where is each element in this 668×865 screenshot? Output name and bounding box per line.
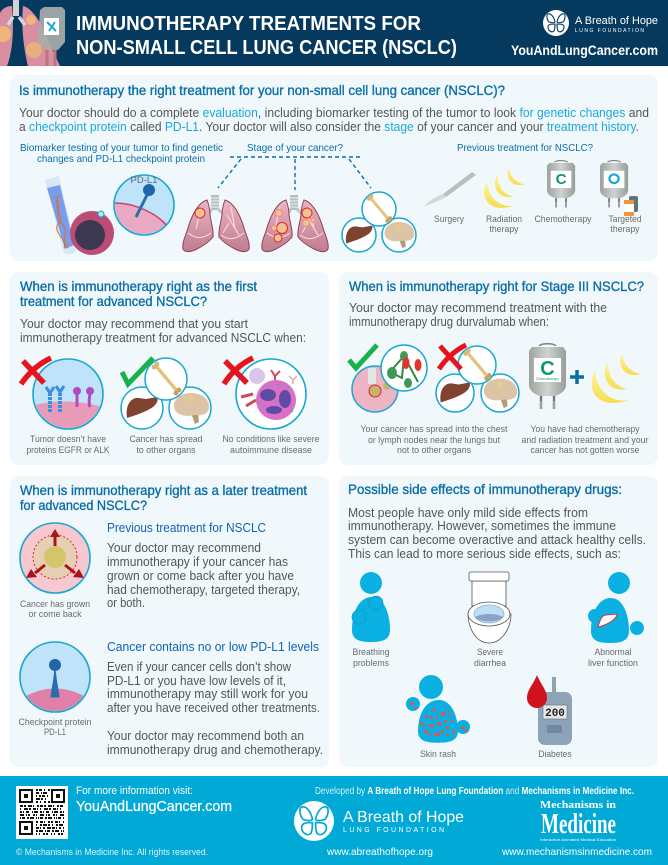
icon: chemotherapy bag: Chemotherapy [536,377,559,381]
treatment captions: Chemotherapy [534,214,592,225]
body text: grown or come back after you have [107,569,294,583]
body text: immunotherapy drug and chemotherapy. [107,743,323,757]
body text: Even if your cancer cells don’t show [107,660,292,674]
caption [352,647,390,669]
treatment captions: therapy [490,224,519,235]
body text [348,506,646,561]
icon: red cross [21,358,51,384]
body text: immunotherapy if your cancer has [107,555,288,569]
website links [326,846,652,858]
icon: immune cell [236,359,306,429]
heading: When is immunotherapy right as the first [20,278,257,294]
captions: and radiation treatment and your [522,435,648,446]
icon: chemotherapy bag [529,344,566,409]
logo: A Breath of Hope: A Breath of Hope [343,809,464,826]
body text: Your doctor may recommend both an [107,729,304,743]
captions: Tumor doesn’t have [30,434,106,445]
visit text: For more information visit: [76,785,193,797]
icon: no EGFR or ALK proteins [33,359,103,429]
body text [107,541,300,610]
caption: Checkpoint protein [18,717,92,728]
icon: growing tumor [20,523,90,593]
caption: liver function [588,658,638,669]
body text [349,301,607,329]
title: IMMUNOTHERAPY TREATMENTS FOR [76,13,422,35]
body text [107,660,323,757]
website links: www.mechanismsinmedicine.com [501,846,652,858]
body text: immunotherapy. However, sometimes the immune [348,519,616,533]
icon: chemotherapy bag: C [540,358,555,380]
header banner [0,0,668,66]
icon: distant organs [342,192,416,252]
body text: had chemotherapy, targeted therapy, [107,583,300,597]
icon: red cross [439,345,466,369]
captions: proteins EGFR or ALK [26,445,110,456]
icon: lungs and infusion bag [0,0,65,66]
logo: A Breath of Hope: LUNG FOUNDATION [575,28,644,34]
body text: Most people have only mild side effects from [348,506,588,520]
caption: PD-L1 [44,727,66,738]
body text [20,317,306,345]
body text: immunotherapy drug durvalumab when: [349,315,549,329]
icon: tumor cell [70,211,114,255]
captions: autoimmune disease [230,445,312,456]
icon: green check [122,358,153,384]
captions: Your cancer has spread into the chest [360,424,508,435]
icon: test tube [45,176,76,254]
visit text: YouAndLungCancer.com [76,798,232,815]
dashed connectors [218,157,371,190]
captions: not to other organs [397,445,471,456]
visit text [76,785,232,815]
panel: stage III NSCLC [339,272,658,465]
icon: PD-L1 magnified: PD-L1 [131,175,157,186]
logo: Mechanisms in Medicine: Medicine [541,809,616,840]
treatment captions [434,214,642,235]
icon: checkpoint protein [20,642,90,712]
body text: immunotherapy treatment for advanced NSCLC when: [20,331,306,345]
footer [0,776,668,865]
title: NON-SMALL CELL LUNG CANCER (NSCLC) [76,37,457,59]
logo: Mechanisms in Medicine: Mechanisms in [540,799,616,811]
body text: immunotherapy may still work for you [107,687,308,701]
logo: A Breath of Hope: LUNG FOUNDATION [343,827,444,834]
intro text: Your doctor should do a complete evaluation, including biomarker testing of the tumor to look for genetic changes and [19,106,649,120]
developed by: Developed by A Breath of Hope Lung Foundation and Mechanisms in Medicine Inc. [315,786,634,797]
captions: to other organs [136,445,196,456]
treatment captions: Targeted [608,214,642,225]
icon: glucose meter and blood drop [527,675,572,745]
body text: PD-L1 or you have low levels of it, [107,674,286,688]
heading: Possible side effects of immunotherapy drugs: [348,481,622,497]
caption: Cancer has grown [20,599,90,610]
captions [26,434,320,456]
icon: radiation moons [484,168,525,208]
caption: Severe [477,647,503,658]
treatment captions: therapy [610,224,640,235]
icon: PD-L1 magnified [114,175,174,245]
previous treatment label: Previous treatment for NSCLC? [457,142,593,154]
biomarker label: Biomarker testing of your tumor to find genetic [20,142,223,154]
icon: green check [349,345,377,368]
caption: diarrhea [474,658,507,669]
panel: possible side effects [339,476,658,767]
captions: or lymph nodes near the lungs but [368,435,500,446]
body text: or both. [107,596,145,610]
icon: chemotherapy bag [547,161,575,208]
caption: or come back [28,609,82,620]
heading: treatment for advanced NSCLC? [20,293,207,309]
intro text: a checkpoint protein called PD-L1. Your doctor will also consider the stage of your cancer and your treatment history. [19,120,639,134]
icon: radiation moons [592,354,641,403]
caption: Abnormal [594,647,632,658]
body text: Your doctor may recommend that you start [20,317,249,331]
body text: system can become overactive and attack healthy cells. [348,533,646,547]
panel: first treatment for advanced NSCLC [10,272,329,465]
heading: When is immunotherapy right for Stage III NSCLC? [349,278,644,294]
caption: problems [353,658,389,669]
icon: chest lymph nodes [352,345,427,412]
icon: breathing problems [352,572,390,642]
caption: Breathing [352,647,390,658]
captions: No conditions like severe [222,434,320,445]
captions [360,424,648,456]
caption: Skin rash [420,749,456,760]
icon: abnormal liver function [588,572,644,643]
logo: A Breath of Hope [543,10,658,36]
icon: plus [570,370,584,384]
stage label: Stage of your cancer? [247,142,343,154]
icon: organs [121,358,211,429]
QR code [16,786,68,839]
body text: after you have received other treatments. [107,701,320,715]
body text: Your doctor may recommend [107,541,261,555]
caption [588,647,638,669]
caption: Diabetes [538,749,572,760]
copyright: © Mechanisms in Medicine Inc. All rights reserved. [16,847,208,858]
heading: Is immunotherapy the right treatment for your non-small cell lung cancer (NSCLC)? [19,82,505,98]
treatment captions: Surgery [434,214,464,225]
icon: toilet [468,572,511,643]
icon: glucose meter and blood drop: 200 [545,708,565,720]
heading: When is immunotherapy right as a later treatment [20,482,307,498]
panel: later treatment for advanced NSCLC [10,476,329,767]
intro text [19,106,649,134]
heading [20,278,257,309]
captions: cancer has not gotten worse [530,445,640,456]
biomarker label [20,142,223,165]
treatment captions: Radiation [486,214,522,225]
icon: lungs one tumor [183,195,249,252]
captions: Cancer has spread [130,434,202,445]
caption [18,717,92,738]
icon: red cross [224,358,253,384]
body text: This can lead to more serious side effects, such as: [348,547,621,561]
biomarker label: changes and PD-L1 checkpoint protein [37,153,205,165]
logo: A Breath of Hope: A Breath of Hope [575,15,658,27]
caption [474,647,507,669]
caption [20,599,90,620]
logo: Mechanisms in Medicine: Interactive Animated Medical Education [540,838,616,842]
icon: chemotherapy bag: C [556,172,567,188]
website links: www.abreathofhope.org [326,846,433,858]
heading: for advanced NSCLC? [20,497,147,513]
icon: skin rash [406,675,470,743]
icon: scalpel [424,172,476,206]
body text: Your doctor may recommend treatment with the [349,301,607,315]
panel: is immunotherapy right [10,75,658,261]
heading [20,482,307,513]
subheading: Previous treatment for NSCLC [107,521,266,535]
icon: lungs multiple tumors [262,195,328,252]
captions: You have had chemotherapy [530,424,640,435]
logo: A Breath of Hope [294,801,464,841]
logo: Mechanisms in Medicine [540,799,616,842]
title [76,13,457,59]
subheading: Cancer contains no or low PD-L1 levels [107,640,319,654]
icon: targeted therapy bag and pills [600,161,638,216]
icon: organs [436,346,519,412]
